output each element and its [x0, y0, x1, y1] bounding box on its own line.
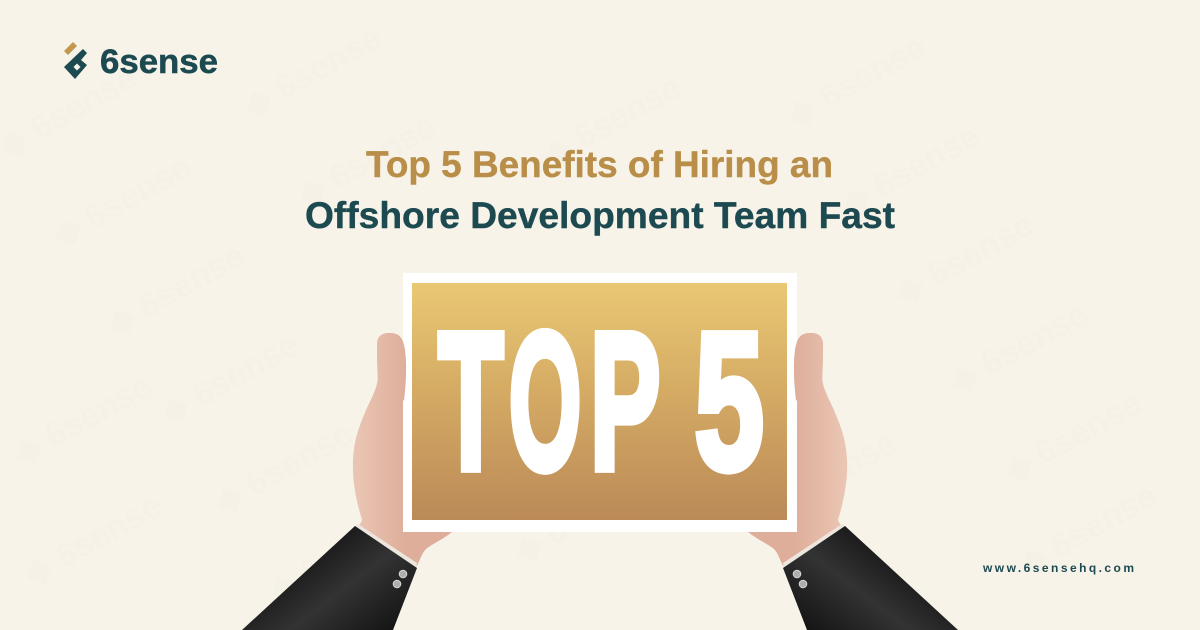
background watermark pattern: ◆: [535, 128, 578, 175]
background watermark pattern: 6sense: [39, 366, 158, 456]
title line 1: Top 5 Benefits of Hiring an: [366, 144, 833, 185]
right shirt cuff: [783, 524, 846, 569]
background watermark pattern: 6sense: [240, 414, 359, 504]
background watermark pattern: 6sense: [1029, 383, 1148, 473]
background watermark pattern: ◆: [942, 355, 985, 402]
background watermark pattern: 6sense: [921, 205, 1040, 295]
background watermark pattern: 6sense: [867, 116, 986, 206]
left cuff buttons: [393, 570, 407, 588]
right sleeve: [783, 526, 958, 630]
right thumb: [794, 333, 823, 410]
left hand palm: [353, 333, 452, 566]
logo wordmark: 6sense: [100, 43, 218, 81]
title line 2: Offshore Development Team Fast: [305, 195, 895, 236]
background watermark pattern: 6sense: [78, 147, 197, 237]
background watermark pattern: ◆: [506, 524, 549, 571]
left sleeve: [242, 526, 417, 630]
board white frame: [403, 273, 797, 532]
background watermark pattern: ◆: [153, 386, 196, 433]
background watermark pattern: ◆: [99, 297, 142, 344]
background watermark pattern: ◆: [236, 79, 279, 126]
background watermark pattern: ◆: [207, 475, 250, 522]
left hand and arm: [242, 333, 452, 630]
background watermark pattern: ◆: [45, 208, 88, 255]
left thumb: [377, 333, 406, 410]
background watermark pattern: 6sense: [294, 503, 413, 593]
title: [305, 144, 895, 236]
board gold panel: [412, 283, 787, 520]
background watermark pattern: 6sense: [813, 27, 932, 117]
background watermark pattern: ◆: [996, 444, 1039, 491]
sign board: [403, 273, 797, 532]
background watermark pattern: ◆: [6, 427, 49, 474]
background watermark pattern: ◆: [1011, 537, 1054, 584]
background watermark pattern: 6sense: [269, 18, 388, 108]
background watermark pattern: ◆: [751, 484, 794, 531]
background watermark pattern: 6sense: [539, 463, 658, 553]
right hand and arm: [748, 333, 958, 630]
background watermark pattern: 6sense: [186, 325, 305, 415]
website url: www.6sensehq.com: [982, 561, 1134, 575]
TOP 5 lettering: 5: [694, 292, 764, 510]
TOP 5 lettering: [438, 292, 764, 511]
TOP 5 lettering: P: [590, 293, 660, 511]
background watermark pattern: 6sense: [784, 423, 903, 513]
right hand palm: [748, 333, 847, 566]
icon: logo mark: [64, 42, 87, 79]
left shirt cuff: [354, 524, 417, 569]
background watermark pattern: 6sense: [1044, 476, 1163, 566]
background watermark pattern: 6sense: [132, 236, 251, 326]
TOP 5 lettering: T: [438, 294, 503, 511]
background watermark pattern: 6sense: [323, 107, 442, 197]
background watermark pattern: ◆: [834, 177, 877, 224]
background watermark pattern: 6sense: [24, 58, 143, 148]
right cuff buttons: [793, 570, 807, 588]
background watermark pattern: ◆: [780, 88, 823, 135]
background watermark pattern: 6sense: [568, 67, 687, 157]
background watermark pattern: ◆: [888, 266, 931, 313]
logo: 6sense: [64, 42, 218, 81]
background watermark pattern: ◆: [261, 564, 304, 611]
background watermark pattern: ◆: [290, 168, 333, 215]
background watermark pattern: ◆: [16, 547, 59, 594]
TOP 5 lettering: O: [509, 294, 581, 511]
background watermark pattern: 6sense: [975, 294, 1094, 384]
background watermark pattern: 6sense: [49, 486, 168, 576]
